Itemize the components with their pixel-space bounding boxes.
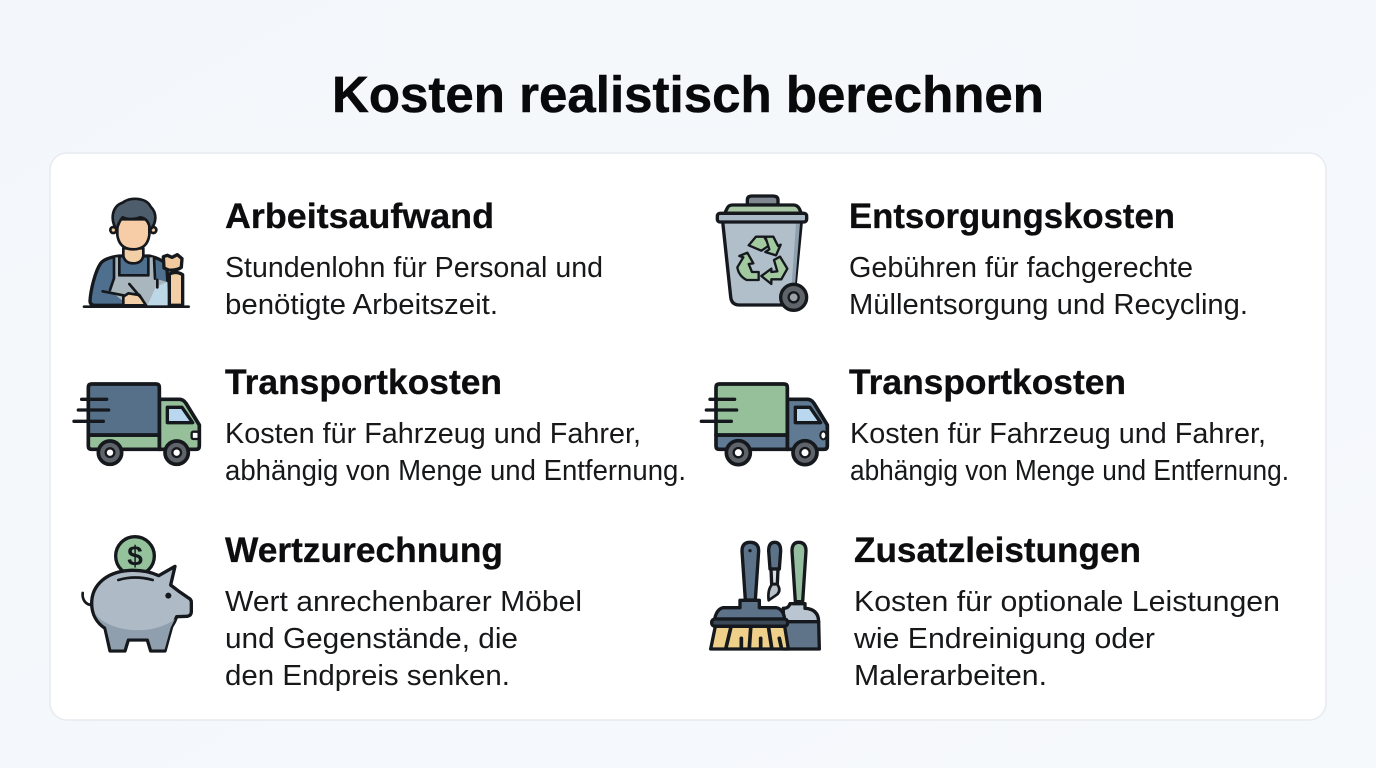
description — [225, 586, 582, 692]
description — [225, 418, 686, 487]
item: Entsorgungskosten — [717, 196, 1248, 321]
item: Arbeitsaufwand — [84, 197, 603, 321]
description: wie Endreinigung oder — [853, 623, 1156, 655]
icon: worker — [84, 199, 189, 307]
title: Kosten realistisch berechnen — [332, 66, 1044, 123]
icon: piggy bank with coin — [83, 537, 191, 651]
description: abhängig von Menge und Entfernung. — [225, 455, 686, 487]
description: Kosten für Fahrzeug und Fahrer, — [850, 418, 1266, 450]
item: Wertzurechnung — [83, 531, 582, 692]
icon: piggy bank with coin: $ — [127, 541, 143, 572]
item: Transportkosten left — [74, 363, 686, 487]
description: Malerarbeiten. — [854, 660, 1047, 692]
panel: cost items card — [50, 153, 1326, 720]
description: Kosten für Fahrzeug und Fahrer, — [225, 418, 641, 450]
icon: truck blue-green — [74, 384, 199, 464]
description — [849, 252, 1248, 321]
description — [850, 418, 1289, 487]
heading: Arbeitsaufwand — [225, 197, 494, 236]
description: Gebühren für fachgerechte — [849, 252, 1193, 284]
description — [853, 586, 1280, 692]
ground line — [84, 303, 189, 311]
description: Müllentsorgung und Recycling. — [849, 289, 1248, 321]
item: Zusatzleistungen — [711, 531, 1280, 692]
description: Kosten für optionale Leistungen — [854, 586, 1280, 618]
heading: Transportkosten — [849, 363, 1126, 402]
heading: Entsorgungskosten — [849, 197, 1175, 236]
description: und Gegenstände, die — [225, 623, 518, 655]
description: Wert anrechenbarer Möbel — [225, 586, 582, 618]
icon: brush and paint tools — [711, 542, 819, 649]
description: Stundenlohn für Personal und — [225, 252, 603, 284]
description: abhängig von Menge und Entfernung. — [850, 455, 1289, 487]
description: benötigte Arbeitszeit. — [225, 289, 498, 321]
heading: Zusatzleistungen — [854, 531, 1141, 570]
item: Transportkosten right — [701, 363, 1289, 487]
icon: recycling bin — [717, 196, 807, 310]
description — [225, 252, 603, 321]
heading: Wertzurechnung — [225, 531, 503, 570]
icon: truck green-blue — [701, 384, 827, 465]
description: den Endpreis senken. — [225, 660, 510, 692]
heading: Transportkosten — [225, 363, 502, 402]
